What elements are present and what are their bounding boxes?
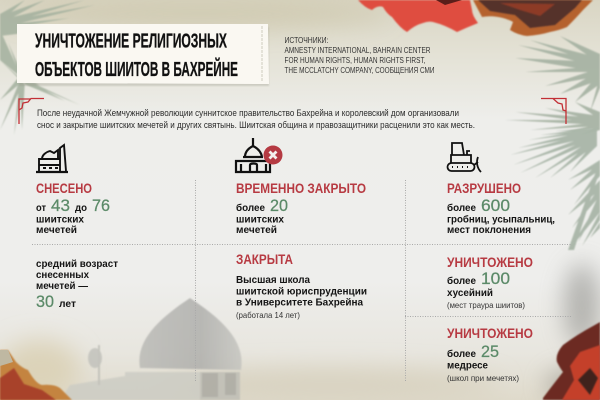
title text: ОБЪЕКТОВ ШИИТОВ В БАХРЕЙНЕ: [35, 57, 238, 81]
icon: closed mosque: [236, 138, 282, 172]
column 1: average age: мечетей —: [36, 280, 88, 292]
column 3: destroyed: более: [447, 202, 476, 214]
column 1: demolished: до: [75, 202, 87, 214]
column 2: temporarily closed: более: [236, 202, 265, 214]
column 3: madrasas: (школ при мечетях): [447, 373, 519, 383]
icon: demolished mosque: [36, 145, 68, 172]
icon: bulldozer: [448, 143, 481, 172]
intro text: После неудачной Жемчужной революции суннитское правительство Бахрейна и королевский дом организовали: [37, 108, 459, 119]
column 1: demolished: мечетей: [36, 224, 77, 236]
column 1: demolished: шиитских: [36, 214, 84, 226]
column 1: average age: снесенных: [36, 269, 89, 281]
column 3: destroyed: [447, 181, 555, 236]
sources: AMNESTY INTERNATIONAL, BAHRAIN CENTER: [284, 45, 430, 55]
column 2: closed: [236, 252, 367, 320]
column 2: temporarily closed: 20: [270, 196, 288, 215]
corner ornament: left: [19, 98, 44, 124]
corner ornament: right: [541, 98, 566, 124]
palm: top right: [505, 36, 600, 135]
title text: [35, 30, 238, 81]
column 3: hussainiyas: более: [447, 275, 476, 287]
column 3: hussainiyas: (мест траура шиитов): [447, 300, 525, 310]
column 1: demolished: 76: [92, 196, 110, 215]
column 3: madrasas: УНИЧТОЖЕНО: [447, 326, 533, 341]
column 3: hussainiyas: 100: [481, 269, 510, 288]
sources: ИСТОЧНИКИ:: [284, 35, 328, 45]
column 3: hussainiyas: УНИЧТОЖЕНО: [447, 255, 533, 270]
column 2: closed: шиитской юриспруденции: [236, 286, 367, 298]
column 1: demolished: [36, 181, 110, 236]
column 2: closed: (работала 14 лет): [236, 310, 300, 320]
intro text: снос и закрытие шиитских мечетей и других святынь. Шиитская община и правозащитники расценили это как месть.: [37, 120, 475, 131]
smoke: right: [564, 263, 600, 347]
palm: top left: [0, 0, 95, 135]
dividers: [32, 180, 572, 382]
fire: bottom right: [543, 322, 600, 400]
sources: THE MCCLATCHY COMPANY, СООБЩЕНИЯ СМИ: [284, 65, 434, 75]
column 3: destroyed: мест поклонения: [447, 224, 531, 236]
title text: УНИЧТОЖЕНИЕ РЕЛИГИОЗНЫХ: [35, 30, 227, 52]
sources: FOR HUMAN RIGHTS, HUMAN RIGHTS FIRST,: [284, 55, 426, 65]
column 3: destroyed: РАЗРУШЕНО: [447, 181, 521, 196]
column 1: demolished: от: [36, 202, 46, 214]
column 3: hussainiyas: [447, 255, 533, 310]
column 3: madrasas: медресе: [447, 360, 488, 372]
title panel: [17, 24, 269, 86]
column 1: average age: лет: [59, 298, 76, 310]
palm: middle right: [510, 128, 600, 250]
column 2: closed: Высшая школа: [236, 274, 310, 286]
red blot: [358, 0, 478, 32]
column 2: closed: ЗАКРЫТА: [236, 252, 293, 267]
column 1: demolished: СНЕСЕНО: [36, 181, 92, 196]
column 1: average age: средний возраст: [36, 258, 118, 270]
column 2: temporarily closed: шиитских: [236, 214, 284, 226]
column 1: demolished: 43: [51, 196, 70, 215]
column 3: destroyed: гробниц, усыпальниц,: [447, 214, 555, 226]
column 3: hussainiyas: хусейний: [447, 287, 493, 299]
column 3: destroyed: 600: [481, 196, 510, 215]
fire: bottom left: [0, 350, 72, 400]
column 2: temporarily closed: [236, 181, 366, 236]
column 1: average age: [36, 258, 118, 311]
column 2: temporarily closed: мечетей: [236, 224, 277, 236]
mosque photo: [60, 298, 242, 400]
column 2: closed: в Университете Бахрейна: [236, 296, 363, 308]
column 3: madrasas: более: [447, 348, 476, 360]
column 2: temporarily closed: ВРЕМЕННО ЗАКРЫТО: [236, 181, 366, 196]
column 1: average age: 30: [36, 292, 54, 311]
column 3: madrasas: 25: [481, 342, 499, 361]
intro text: [37, 108, 475, 131]
column 3: madrasas: [447, 326, 533, 383]
sources: [284, 35, 434, 75]
dark flower: [436, 0, 593, 36]
